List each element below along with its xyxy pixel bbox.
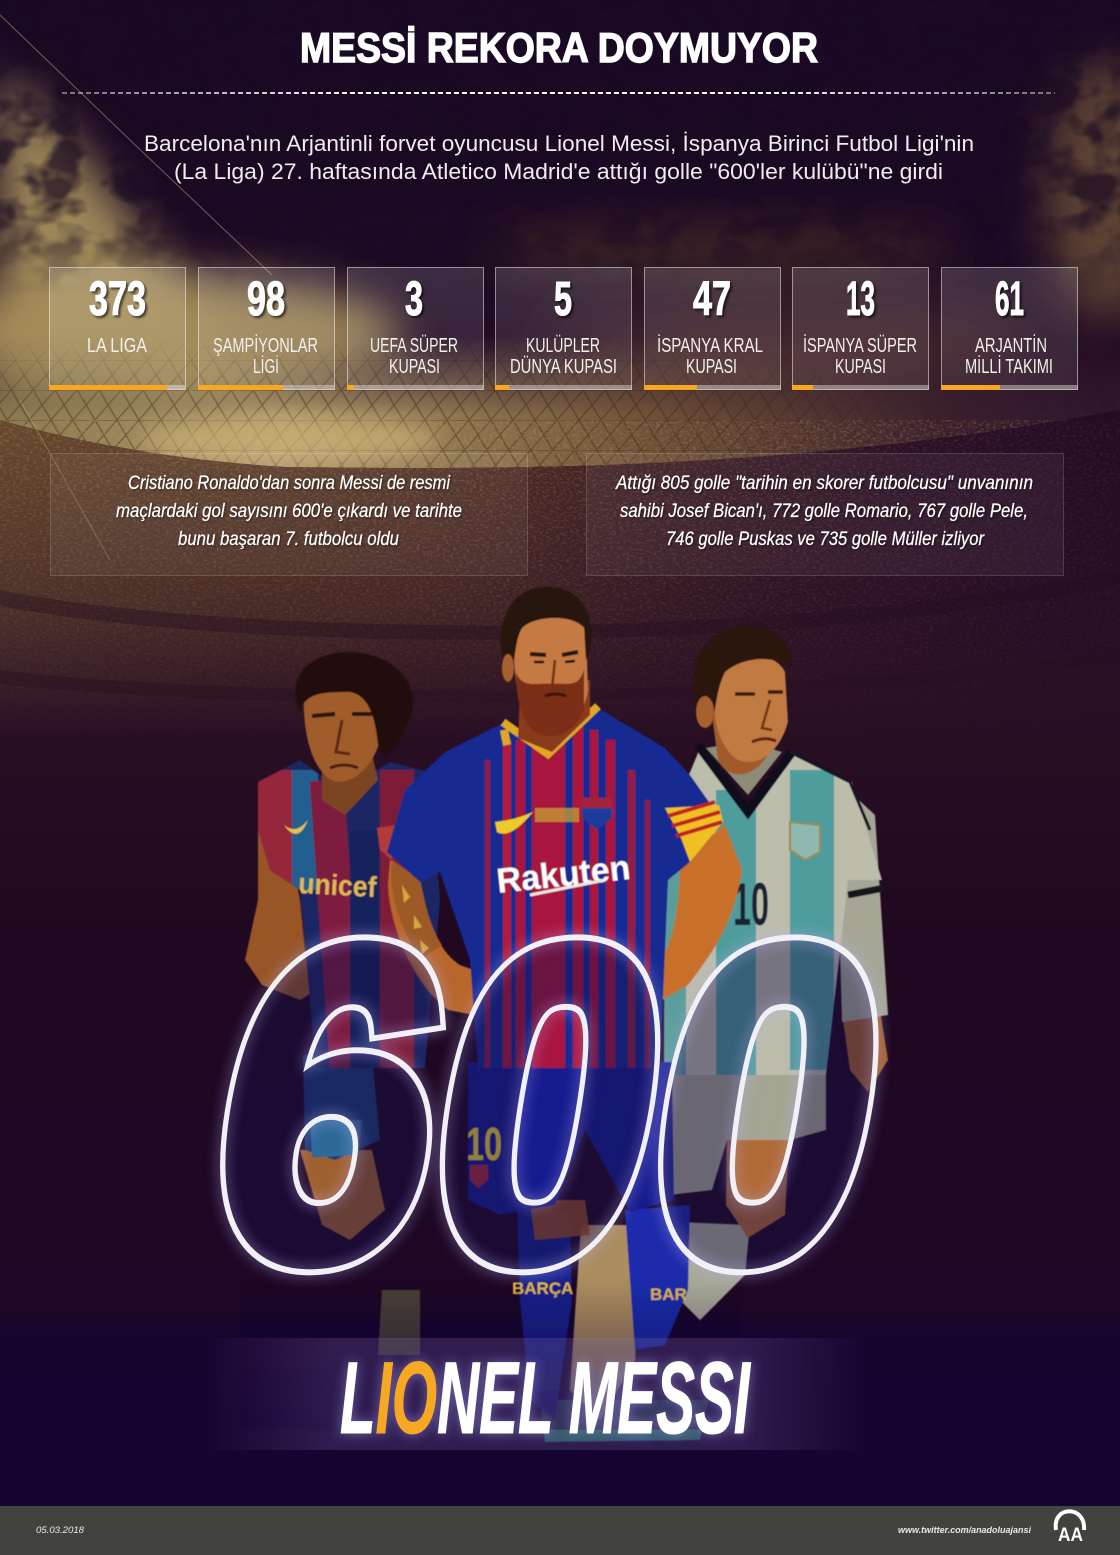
card: La Liga: 373 — [89, 273, 146, 326]
big number 600: 600 — [185, 856, 916, 1351]
intro text: (La Liga) 27. haftasında Atletico Madrid'e attığı golle "600'ler kulübü"ne girdi — [174, 159, 943, 184]
big number 600: 600 — [185, 856, 916, 1351]
card: La Liga: LA LIGA — [87, 335, 148, 357]
card: İspanya Süper Kupası: İSPANYA SÜPER — [803, 334, 917, 357]
card: Arjantin Milli Takımı: MİLLİ TAKIMI — [965, 355, 1053, 378]
player: centre Messi in Barcelona shirt: Rakuten — [495, 848, 632, 901]
card: Kulüpler Dünya Kupası: 5 — [554, 273, 572, 326]
name band with LIONEL MESSI — [200, 1338, 870, 1455]
title: MESSİ REKORA DOYMUYOR — [300, 24, 818, 71]
card: Şampiyonlar Ligi: LİGİ — [253, 355, 279, 378]
icon: Anadolu Agency logo: AA — [1058, 1525, 1083, 1546]
panel: Ronaldo note: bunu başaran 7. futbolcu oldu — [178, 529, 399, 550]
card: Kulüpler Dünya Kupası: DÜNYA KUPASI — [510, 356, 617, 378]
icon: Anadolu Agency logo — [1056, 1511, 1084, 1546]
panel: top scorers note: Attığı 805 golle "tarihin en skorer futbolcusu" unvanının — [615, 473, 1033, 494]
big number 600 — [210, 925, 888, 1285]
card: Şampiyonlar Ligi: 98 — [247, 273, 285, 326]
player: Argentina Messi, right: 10 — [733, 871, 769, 938]
footer bar — [0, 1506, 1120, 1555]
player: centre Messi in Barcelona shirt: BARÇA — [512, 1279, 573, 1298]
social link: www.twitter.com/anadoluajansi — [898, 1525, 1031, 1536]
card: Şampiyonlar Ligi: ŞAMPİYONLAR — [213, 334, 318, 357]
players: three portraits of Messi — [240, 587, 888, 1442]
intro text: Barcelona'nın Arjantinli forvet oyuncusu Lionel Messi, İspanya Birinci Futbol Ligi'nin — [144, 131, 974, 156]
panel: Ronaldo note: maçlardaki gol sayısını 600'e çıkardı ve tarihte — [116, 501, 462, 522]
card: İspanya Kral Kupası — [644, 268, 781, 390]
card: İspanya Kral Kupası: İSPANYA KRAL — [657, 334, 763, 357]
panel: Ronaldo note: Cristiano Ronaldo'dan sonra Messi de resmi — [128, 473, 451, 494]
panel: Ronaldo note — [50, 454, 528, 576]
stat cards — [49, 268, 1078, 390]
card: UEFA Süper Kupası: UEFA SÜPER — [370, 335, 458, 357]
card: La Liga — [49, 268, 186, 390]
card: UEFA Süper Kupası: KUPASI — [389, 356, 440, 378]
player: centre Messi in Barcelona shirt: 10 — [466, 1118, 502, 1170]
player: centre Messi in Barcelona shirt — [387, 587, 742, 1442]
card: Kulüpler Dünya Kupası: KULÜPLER — [526, 335, 600, 357]
player: young Messi, left: unicef — [298, 868, 378, 904]
name band with LIONEL MESSI: LIONEL MESSI — [340, 1341, 752, 1455]
card: İspanya Kral Kupası: 47 — [693, 273, 731, 326]
card: UEFA Süper Kupası: 3 — [405, 273, 423, 326]
panel: top scorers note — [586, 454, 1064, 576]
card: İspanya Süper Kupası — [792, 268, 929, 390]
card: Şampiyonlar Ligi — [198, 268, 335, 390]
panel: top scorers note: sahibi Josef Bican'ı, 772 golle Romario, 767 golle Pele, — [620, 501, 1028, 522]
player: young Messi, left — [245, 652, 440, 1355]
card: Kulüpler Dünya Kupası — [495, 268, 632, 390]
player: Argentina Messi, right — [664, 626, 888, 1320]
card: Arjantin Milli Takımı: ARJANTİN — [975, 334, 1047, 357]
card: UEFA Süper Kupası — [347, 268, 484, 390]
card: İspanya Kral Kupası: KUPASI — [686, 356, 737, 378]
player: centre Messi in Barcelona shirt: BAR — [650, 1285, 687, 1304]
card: Arjantin Milli Takımı — [941, 268, 1078, 390]
panel: top scorers note: 746 golle Puskas ve 735 golle Müller izliyor — [666, 529, 985, 550]
card: İspanya Süper Kupası: KUPASI — [835, 356, 886, 378]
card: İspanya Süper Kupası: 13 — [846, 273, 875, 326]
date: 05.03.2018 — [36, 1525, 85, 1536]
intro text — [144, 131, 974, 184]
card: Arjantin Milli Takımı: 61 — [995, 273, 1024, 326]
